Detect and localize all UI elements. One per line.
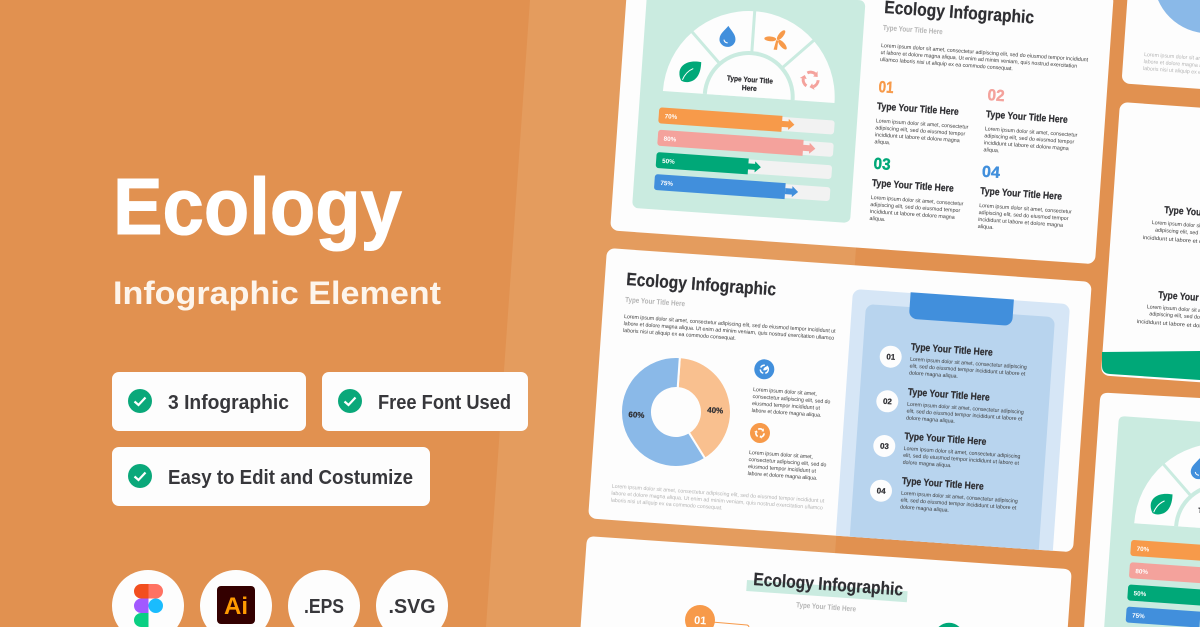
list row 02: Lorem ipsum dolor sit amet, consectetur adipiscing [907,402,1024,416]
donut note 1: Lorem ipsum dolor sit amet, [753,387,818,397]
item 04: adipiscing elit, sed do eiusmod tempor [978,210,1069,222]
slide 1 intro text [880,43,1089,77]
item 04: incididunt ut labore et dolore magna [978,217,1063,229]
item 03: Lorem ipsum dolor sit amet, consectetur [871,195,964,207]
title highlight [746,580,908,602]
list row 04: Type Your Title Here [901,476,984,493]
list row 01: Type Your Title Here [910,342,993,359]
list row 01: Lorem ipsum dolor sit amet, consectetur adipiscing [910,357,1027,371]
donut note 2 [747,450,827,482]
fan title: Type Your Title [727,73,773,86]
item 01: 01 [878,79,894,97]
feature pill: Easy to Edit and Costumize: Easy to Edit and Costumize [168,467,413,489]
icon: Adobe Illustrator [200,570,272,627]
list row 02 [876,387,1025,430]
panel: slide bottom right [1084,393,1200,627]
list row 03: elit, sed do eiusmod tempor incididunt ut labore et [903,453,1020,467]
progress bar 70%: 70% [1136,546,1150,554]
item 04: Type Your Title Here [980,186,1063,203]
item 03: Type Your Title Here [871,178,954,195]
item 04 [977,164,1075,236]
list row 04: 04 [876,486,886,496]
list row 03 [873,431,1022,474]
progress bar 70%: 70% [664,113,678,121]
list row 02: 02 [883,397,893,406]
panel: slide 2 donut and list [588,248,1092,552]
text block 2 [1137,290,1200,333]
item 01: Lorem ipsum dolor sit amet, consectetur [876,118,969,131]
mint panel [1104,416,1200,627]
item 02: Type Your Title Here [985,109,1068,126]
item 04: Lorem ipsum dolor sit amet, consectetur [979,203,1072,215]
slide 2 intro text: labore et dolore magna aliqua. Ut enim ad minim veniam, quis nostrud exercitation ullamco [623,321,834,342]
list row 01 [880,342,1028,385]
icon: Adobe Illustrator: Ai [224,593,248,620]
feature pill: 3 Infographic [112,372,306,431]
item 02: aliqua. [983,147,1000,154]
icon: SVG [376,570,448,627]
icon: water drop [719,25,736,47]
progress bar 50%: 50% [662,158,675,166]
slide 2 subtitle: Type Your Title Here [625,295,685,308]
list row 03: Lorem ipsum dolor sit amet, consectetur adipiscing [903,446,1021,460]
item 03: adipiscing elit, sed do eiusmod tempor [870,202,961,214]
slide 1 subtitle: Type Your Title Here [883,23,943,36]
feature pill: Easy to Edit and Costumize [112,447,430,506]
icon: water drop [1190,458,1200,480]
feature pill: Free Font Used [322,372,528,431]
feature pill: 3 Infographic: 3 Infographic [168,392,289,414]
icon: EPS [288,570,360,627]
lighter diagonal band [486,0,873,627]
slide 2 intro text: laboris nisi ut aliquip ex ea commodo consequat. [623,328,736,342]
panel: slide 3 bottom [581,537,1071,627]
donut note 1: consectetur adipiscing elit, sed do [752,394,831,405]
progress bar 75%: 75% [660,180,674,188]
donut note 1 [751,387,831,419]
icon: recycle [799,70,821,91]
list row 02: dolore magna aliqua. [906,415,955,425]
heading: Ecology: Ecology [113,162,402,251]
item 01: incididunt ut labore et dolore magna [875,132,960,144]
panel: slide right middle [1101,102,1200,409]
progress bar 80% [657,130,834,158]
slide 3 title: Ecology Infographic [753,569,904,599]
list row 03: 03 [880,442,890,451]
clipboard list panel [836,288,1070,551]
donut note 2: eiusmod tempor incididunt ut [748,464,817,475]
list row 04 [870,476,1019,519]
list row 03: Type Your Title Here [904,431,987,448]
item 03 [869,156,966,228]
slide 2 intro text: Lorem ipsum dolor sit amet, consectetur adipiscing elit, sed do eiusmod tempor incididunt ut [624,314,836,335]
icon: wind turbine [764,28,789,51]
blue donut fragment [1154,0,1200,34]
item 03: 03 [873,156,891,174]
icon: leaf [1150,493,1173,515]
icon: leaf [679,60,701,83]
list row 04: elit, sed do eiusmod tempor incididunt ut labore et [900,497,1017,512]
item 02 [983,87,1080,160]
progress bar 75% [1126,606,1200,627]
badge 01 [685,605,715,627]
progress bar 50% [656,152,832,180]
item 02: incididunt ut labore et dolore magna [984,140,1069,152]
list row 01: dolore magna aliqua. [909,370,958,380]
item 01 [874,79,971,152]
slide 1 intro text: ut labore et dolore magna aliqua. Ut enim ad minim veniam, quis nostrud exercitation [880,50,1077,70]
gray footnote [611,484,825,519]
item 02: 02 [987,87,1005,105]
progress bar 75%: 75% [1132,612,1145,620]
item 02: adipiscing elit, sed do eiusmod tempor [984,133,1075,146]
item 04: aliqua. [977,224,994,231]
item 04: 04 [981,164,1001,182]
text block 1 [1143,205,1200,249]
progress bar 80%: 80% [1135,568,1149,576]
progress bar 50%: 50% [1133,590,1147,598]
mint panel [632,0,866,223]
green badge [938,623,960,627]
gray footnote: Lorem ipsum dolor sit amet, consectetur adipiscing elit, sed do eiusmod tempor incididunt ut [612,484,825,505]
item 02: Lorem ipsum dolor sit amet, consectetur [985,126,1078,139]
slide 2 title: Ecology Infographic [626,269,777,299]
list row 01: 01 [886,352,896,362]
item 01: Type Your Title Here [876,101,959,118]
donut note 1: eiusmod tempor incididunt ut [752,401,821,412]
progress bar 75% [654,174,831,202]
feature pill: Free Font Used: Free Font Used [378,392,511,414]
donut chart [617,353,735,471]
progress bar 80% [1129,562,1200,583]
icon: blue badge [754,359,775,380]
semicircle fan: Here [742,83,757,93]
panel: slide top right [1121,0,1200,117]
connector [700,621,749,627]
list row 04: Lorem ipsum dolor sit amet, consectetur adipiscing [901,491,1018,505]
icon: orange recycle badge [749,422,771,444]
list row 02: Type Your Title Here [907,387,990,404]
progress bar 50% [1127,584,1200,606]
list row 04: dolore magna aliqua. [900,504,949,514]
donut note 1: labore et dolore magna aliqua. [751,408,822,419]
gray footnote: laboris nisi ut aliquip ex ea commodo consequat. [611,498,723,511]
slide 3 subtitle: Type Your Title Here [796,600,856,613]
semicircle fan [663,4,841,103]
item 03: aliqua. [869,216,886,223]
gray text [1143,52,1200,87]
item 01: adipiscing elit, sed do eiusmod tempor [875,125,966,138]
donut label 40%: 40% [707,405,723,416]
list row 02: elit, sed do eiusmod tempor incididunt ut labore et [906,408,1023,423]
slide 1 intro text: Lorem ipsum dolor sit amet, consectetur adipiscing elit, sed do eiusmod tempor incididunt [881,43,1089,64]
icon: EPS: .EPS [304,596,344,618]
donut note 2: Lorem ipsum dolor sit amet, [749,450,814,460]
slide 2 intro text [623,314,836,349]
gray footnote: labore et dolore magna aliqua. Ut enim ad minim veniam, quis nostrud exercitation ullamco [611,491,823,511]
list row 03: dolore magna aliqua. [902,460,952,469]
slide 1 intro text: ullamco laboris nisi ut aliquip ex ea commodo consequat. [880,57,1013,72]
progress bar 70% [1130,540,1200,561]
icon: SVG: .SVG [388,596,436,618]
item 01: aliqua. [874,139,891,146]
donut note 2: labore et dolore magna aliqua. [747,471,818,482]
donut label 60%: 60% [628,410,645,420]
panel: slide 1 bars and fan [610,0,1114,264]
icon: Figma [112,570,184,627]
progress bar 80%: 80% [663,136,677,143]
list row 01: elit, sed do eiusmod tempor incididunt ut labore et [909,363,1026,378]
semicircle fan [1134,437,1200,535]
green footer band [1102,351,1200,380]
subheading: Infographic Element [113,275,441,311]
item 03: incididunt ut labore et dolore magna [870,209,955,221]
donut note 2: consectetur adipiscing elit, sed do [748,457,827,468]
progress bar 70% [658,107,835,136]
